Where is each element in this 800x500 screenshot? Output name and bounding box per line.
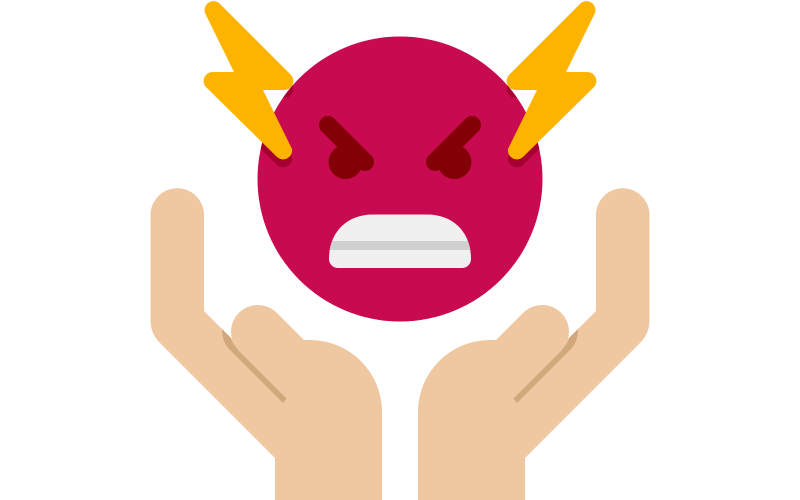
left eye and brow xyxy=(328,125,365,179)
left lightning bolt xyxy=(204,1,293,159)
teeth line xyxy=(325,241,475,250)
left hand xyxy=(150,188,382,500)
right finger shadow xyxy=(513,329,578,403)
right eye and brow xyxy=(435,125,472,179)
right hand xyxy=(418,188,650,500)
left hand palm and finger xyxy=(231,305,382,500)
lightning bolt shadows on face xyxy=(260,86,540,168)
right lightning bolt xyxy=(507,1,596,159)
left finger shadow xyxy=(222,329,287,403)
illustration: angry face between two hands xyxy=(150,1,650,500)
angry face xyxy=(258,36,542,322)
right hand palm and finger xyxy=(418,305,569,500)
gritted teeth mouth xyxy=(325,214,475,268)
